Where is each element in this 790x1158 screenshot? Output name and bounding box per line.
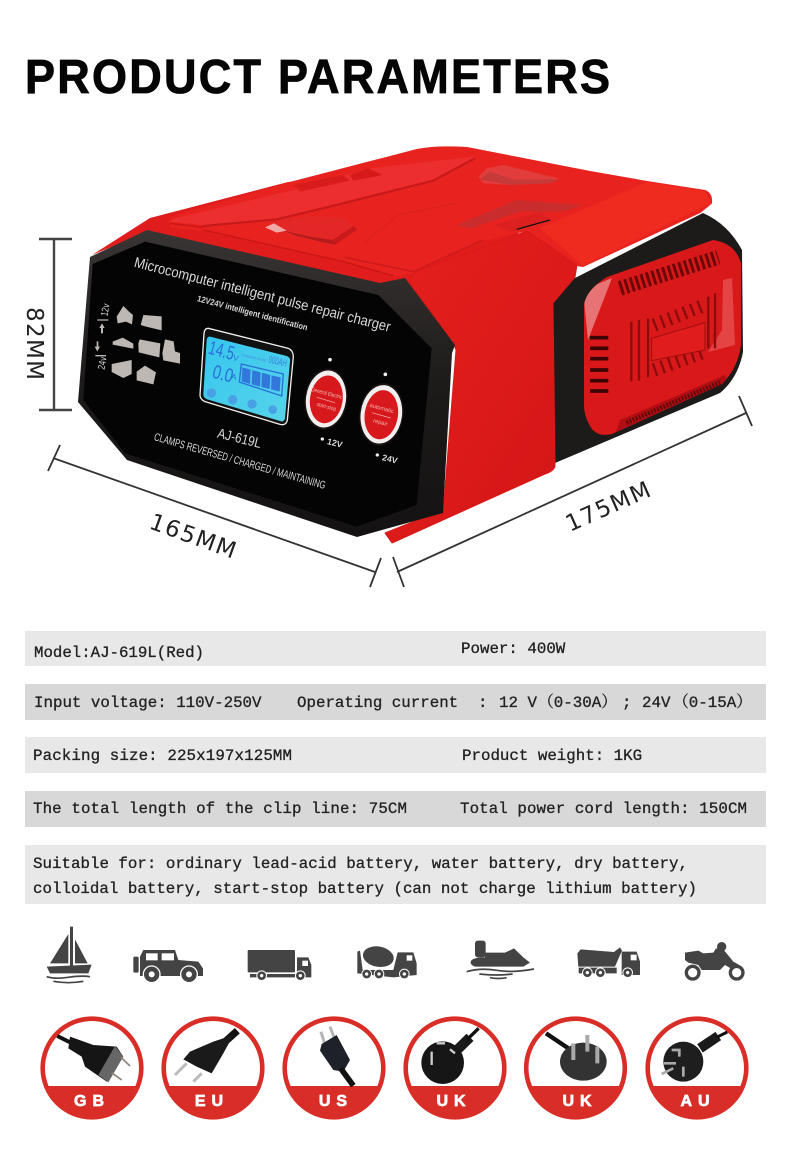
- red wrap-around panel: [385, 231, 577, 543]
- dimension: depth 175MM: [393, 396, 752, 587]
- side vent panel: [583, 240, 741, 435]
- status caption: CLAMPS REVERSED / CHARGED / MAINTAINING: [153, 431, 327, 492]
- icon: cement mixer: [357, 943, 417, 979]
- vehicle pictograms on face: 24v: [96, 356, 109, 371]
- plug type badges: [43, 1019, 746, 1119]
- row: voltage and current: 12 V: [499, 694, 537, 712]
- row: packing size and weight: Packing size: 225x197x125MM: [33, 747, 292, 765]
- vehicle icons row: [47, 927, 743, 983]
- button: start-stop: General Electric: [310, 387, 343, 401]
- row: cable lengths: The total length of the clip line: 75CM: [33, 800, 407, 818]
- dimension: height 82MM: 82MM: [21, 307, 47, 380]
- dimension: height 82MM: [21, 239, 72, 410]
- badge: EU plug: EU: [195, 1093, 229, 1110]
- row: voltage and current: :: [478, 694, 487, 712]
- row: voltage and current: ;: [622, 694, 631, 712]
- dimension: depth 175MM: 175MM: [562, 477, 655, 537]
- LCD screen: [200, 328, 293, 425]
- vehicle pictograms on face: [95, 303, 180, 384]
- badge: UK plug: UK: [436, 1093, 472, 1110]
- vehicle pictograms on face: 12v: [99, 303, 112, 317]
- icon: inflatable boat: [467, 941, 534, 978]
- badge: AU plug: [648, 1019, 746, 1119]
- row: suitable batteries: Suitable for: ordinary lead-acid battery, water battery, dry battery,: [33, 855, 688, 873]
- dimension: width 165MM: [48, 445, 381, 587]
- icon: jeep: [133, 950, 203, 983]
- button: start-stop: [301, 358, 351, 450]
- row: suitable batteries: [25, 845, 766, 904]
- row: voltage and current: Input voltage: 110V-250V: [34, 694, 262, 712]
- charger rear body: [92, 170, 560, 340]
- row: voltage and current: （0-30A）: [538, 694, 617, 712]
- row: cable lengths: [25, 791, 766, 827]
- badge: US plug: US: [319, 1093, 353, 1110]
- button: start-stop: start-stop: [316, 402, 337, 413]
- LCD screen: 14.5: [206, 338, 237, 365]
- icon: box truck: [248, 950, 311, 981]
- LCD screen: V: [232, 353, 240, 363]
- button: automatic repair: automatic: [369, 403, 394, 415]
- button: automatic repair: repair: [372, 418, 388, 428]
- LCD screen: A: [230, 372, 238, 382]
- row: voltage and current: Operating current: [297, 694, 458, 712]
- badge: GB plug: GB: [74, 1093, 110, 1110]
- row: model and power: Power: 400W: [461, 640, 566, 658]
- control face: [83, 242, 432, 527]
- lid top: [169, 147, 711, 276]
- badge: UK plug: [406, 1019, 504, 1119]
- icon: dump truck: [577, 947, 640, 978]
- row: packing size and weight: Product weight: 1KG: [462, 747, 642, 765]
- black bezel: [78, 230, 455, 537]
- LCD screen: Completion charge: [240, 352, 267, 363]
- row: suitable batteries: colloidal battery, start-stop battery (can not charge lithium battery): [33, 880, 697, 898]
- icon: sailboat: [47, 927, 92, 983]
- button: automatic repair: 24V: [381, 452, 399, 466]
- model number: AJ-619L: [216, 425, 263, 451]
- face heading: Microcomputer intelligent pulse repair charger: [132, 255, 392, 336]
- face subheading: 12V24V intelligent identification: [196, 293, 309, 332]
- row: packing size and weight: [25, 737, 766, 773]
- LCD screen: 0.0: [210, 362, 235, 388]
- row: voltage and current: [25, 684, 766, 720]
- badge: US plug: [285, 1019, 383, 1119]
- dimension: width 165MM: 165MM: [146, 509, 239, 564]
- badge: AU plug: AU: [680, 1093, 716, 1110]
- black side housing: [553, 213, 743, 463]
- badge: GB plug: [43, 1019, 141, 1119]
- parameters table: [25, 631, 766, 904]
- row: model and power: [25, 631, 766, 666]
- badge: UK plug round: [526, 1019, 625, 1119]
- row: cable lengths: Total power cord length: 150CM: [460, 800, 747, 818]
- badge: UK plug round: UK: [562, 1093, 598, 1110]
- row: voltage and current: 24V: [642, 694, 671, 712]
- button: automatic repair: [355, 372, 407, 466]
- button: start-stop: 12V: [326, 436, 344, 450]
- LCD screen: 000AH: [267, 354, 288, 370]
- row: model and power: Model:AJ-619L(Red): [34, 644, 204, 662]
- product: battery charger: [78, 147, 743, 543]
- title: PRODUCT PARAMETERS: [25, 50, 610, 103]
- icon: motorcycle: [685, 942, 743, 979]
- badge: EU plug: [164, 1019, 262, 1119]
- row: voltage and current: （0-15A）: [673, 694, 752, 712]
